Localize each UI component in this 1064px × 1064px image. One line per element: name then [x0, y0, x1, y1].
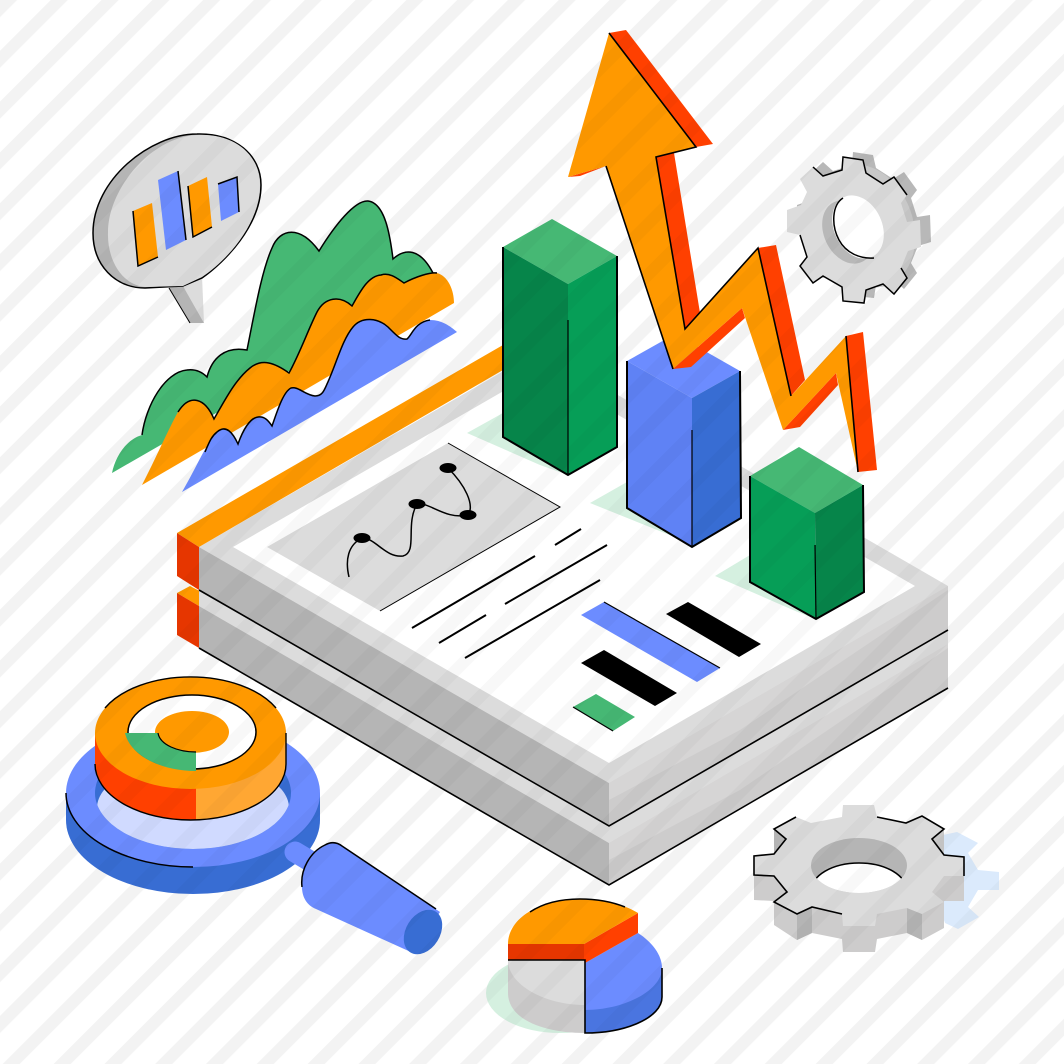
shadows under bars — [467, 413, 815, 619]
bar: blue column — [627, 334, 741, 547]
pie slice: blue — [585, 968, 662, 1033]
arrow orange face — [568, 33, 858, 472]
arrow: rising zigzag trend arrow — [568, 30, 877, 472]
icon: upper gear — [787, 151, 932, 303]
chart: line chart on gray paper card — [267, 443, 560, 611]
orange binding strip — [177, 345, 503, 547]
panel: upper slab of report stack — [177, 345, 948, 826]
icon: pale blue background gear — [930, 832, 999, 929]
pie slice: gray — [508, 960, 585, 1033]
pie shadow — [486, 953, 634, 1033]
area series: blue — [182, 319, 457, 492]
icon: magnifying glass — [65, 743, 442, 954]
arrow red extrusion — [568, 30, 877, 472]
bar: tall green column — [503, 219, 617, 475]
area chart: three mountain series — [112, 201, 457, 492]
handle neck — [295, 852, 325, 870]
chart: 3D pie chart — [486, 899, 662, 1033]
panel: lower slab of report stack — [177, 586, 948, 885]
legend bars on report — [573, 602, 761, 731]
pie slice: orange — [508, 944, 584, 960]
handle grip — [302, 843, 440, 953]
area series: orange — [142, 273, 454, 485]
lens rim — [66, 793, 320, 894]
text lines placeholder — [412, 529, 607, 658]
gear side wall — [754, 870, 964, 952]
icon: lower gear — [754, 805, 964, 952]
red binding cap — [177, 533, 199, 590]
icon: speech bubble with mini bar chart — [93, 134, 261, 323]
area series: green — [112, 201, 433, 473]
chart: 3D donut chart — [95, 677, 286, 820]
bar: short green column — [750, 447, 864, 619]
